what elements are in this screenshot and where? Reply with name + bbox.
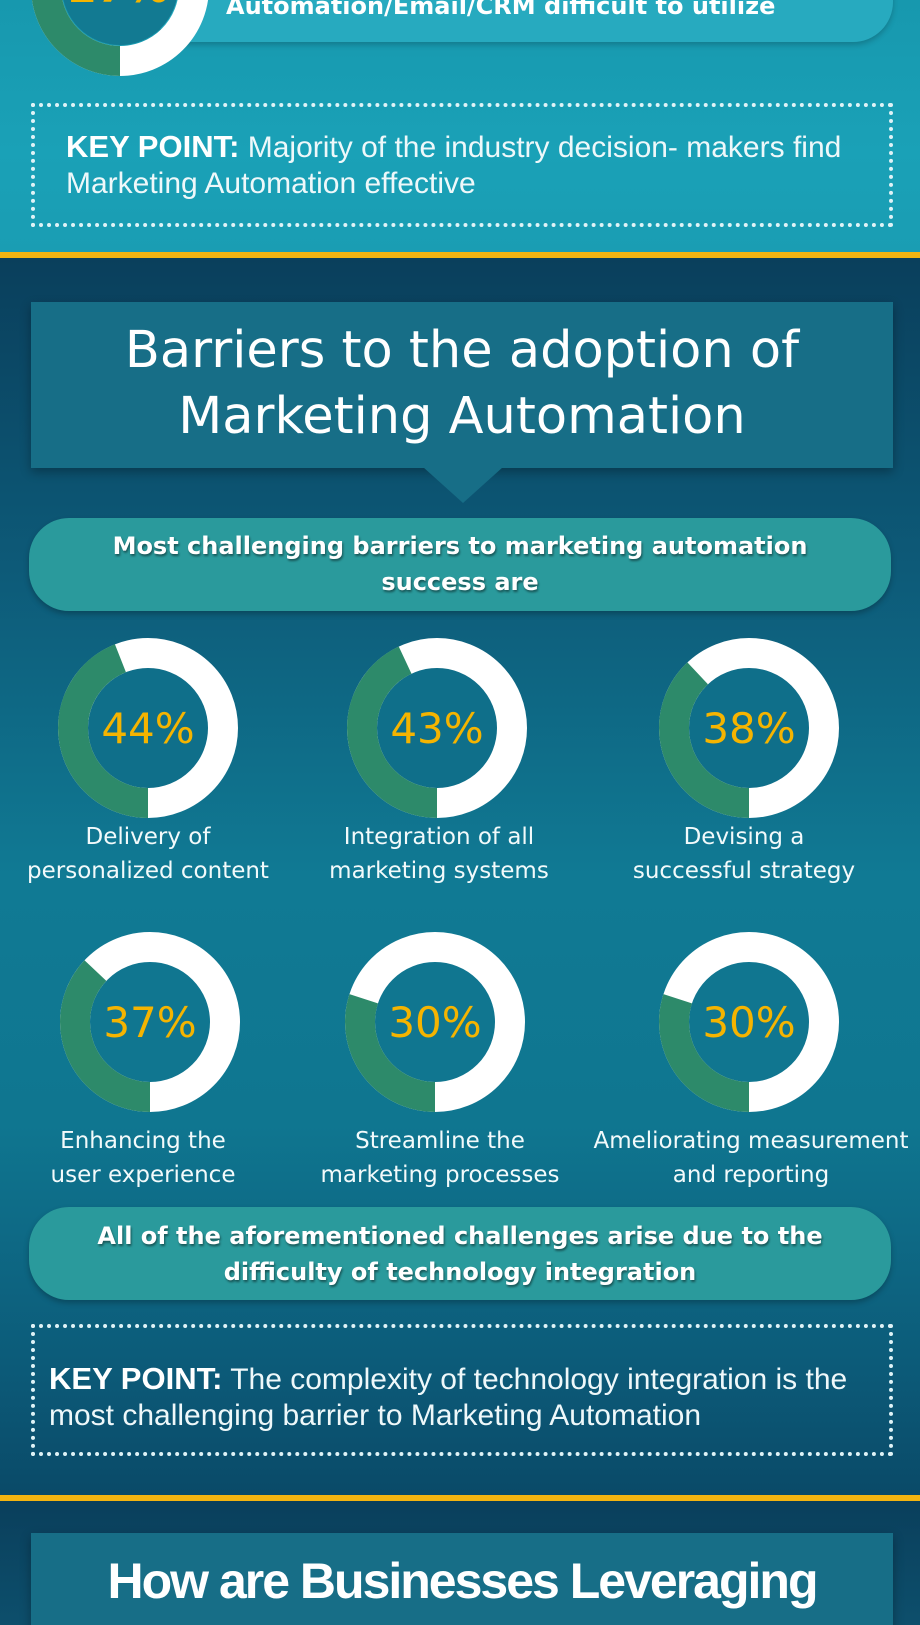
donut 30% a: 30% [388, 998, 482, 1047]
top pill: difficult to utilize [150, 0, 893, 42]
title box: how are businesses leveraging [31, 1533, 893, 1625]
title box: barriers [31, 302, 893, 468]
divider line [0, 1495, 920, 1501]
section background barriers [0, 258, 920, 1495]
donut 30% b [674, 947, 824, 1097]
label: measurement: and reporting [673, 1162, 829, 1188]
label: integration: Integration of all [344, 824, 534, 850]
donut 38% [674, 653, 824, 803]
donut 30% b: 30% [702, 998, 796, 1047]
top donut 27% [32, 0, 208, 76]
label: integration: marketing systems [329, 858, 549, 884]
donut 43%: 43% [390, 704, 484, 753]
pill: most challenging barriers [29, 518, 891, 611]
key point box 1: KEY POINT: Majority of the industry decision- makers find Marketing Automation effective [66, 129, 841, 200]
key point box 2 [31, 1324, 893, 1456]
label: streamline: marketing processes [320, 1162, 560, 1188]
label: user experience: Enhancing the [60, 1128, 226, 1154]
title box: how are businesses leveraging: How are Businesses Leveraging [108, 1553, 816, 1609]
title pointer [423, 467, 503, 503]
pill: challenges arise [29, 1207, 891, 1300]
donut 44%: 44% [101, 704, 195, 753]
label: user experience: user experience [51, 1162, 235, 1188]
label: delivery: personalized content [27, 858, 269, 884]
label: strategy: Devising a [684, 824, 804, 850]
label: user experience [51, 1128, 235, 1188]
pill: most challenging barriers: Most challenging barriers to marketing automation [113, 532, 807, 560]
key point box 1 [31, 103, 893, 227]
label: delivery: Delivery of [86, 824, 210, 850]
pill: challenges arise: difficulty of technology integration [224, 1258, 696, 1286]
label: delivery [27, 824, 269, 884]
donut 44% [73, 653, 223, 803]
key point box 2: KEY POINT: The complexity of technology integration is the most challenging barrier to Marketing Automation [49, 1361, 847, 1432]
label: streamline [320, 1128, 560, 1188]
divider line [0, 252, 920, 258]
title box: barriers: Barriers to the adoption of [125, 321, 799, 380]
donut 30% a [360, 947, 510, 1097]
section background top [0, 0, 920, 252]
pill: most challenging barriers: success are [381, 568, 539, 596]
donut 43% [362, 653, 512, 803]
pill: challenges arise: All of the aforementioned challenges arise due to the [97, 1222, 823, 1250]
label: strategy: successful strategy [633, 858, 855, 884]
label: measurement: Ameliorating measurement [593, 1128, 909, 1154]
donut 38%: 38% [702, 704, 796, 753]
label: integration [329, 824, 549, 884]
donut charts grid [58, 638, 839, 1112]
label: streamline: Streamline the [355, 1128, 525, 1154]
label: measurement [593, 1128, 909, 1188]
label: strategy [633, 824, 855, 884]
donut 37%: 37% [103, 998, 197, 1047]
donut 37% [75, 947, 225, 1097]
title box: barriers: Marketing Automation [178, 387, 746, 446]
section background bottom [0, 1501, 920, 1625]
